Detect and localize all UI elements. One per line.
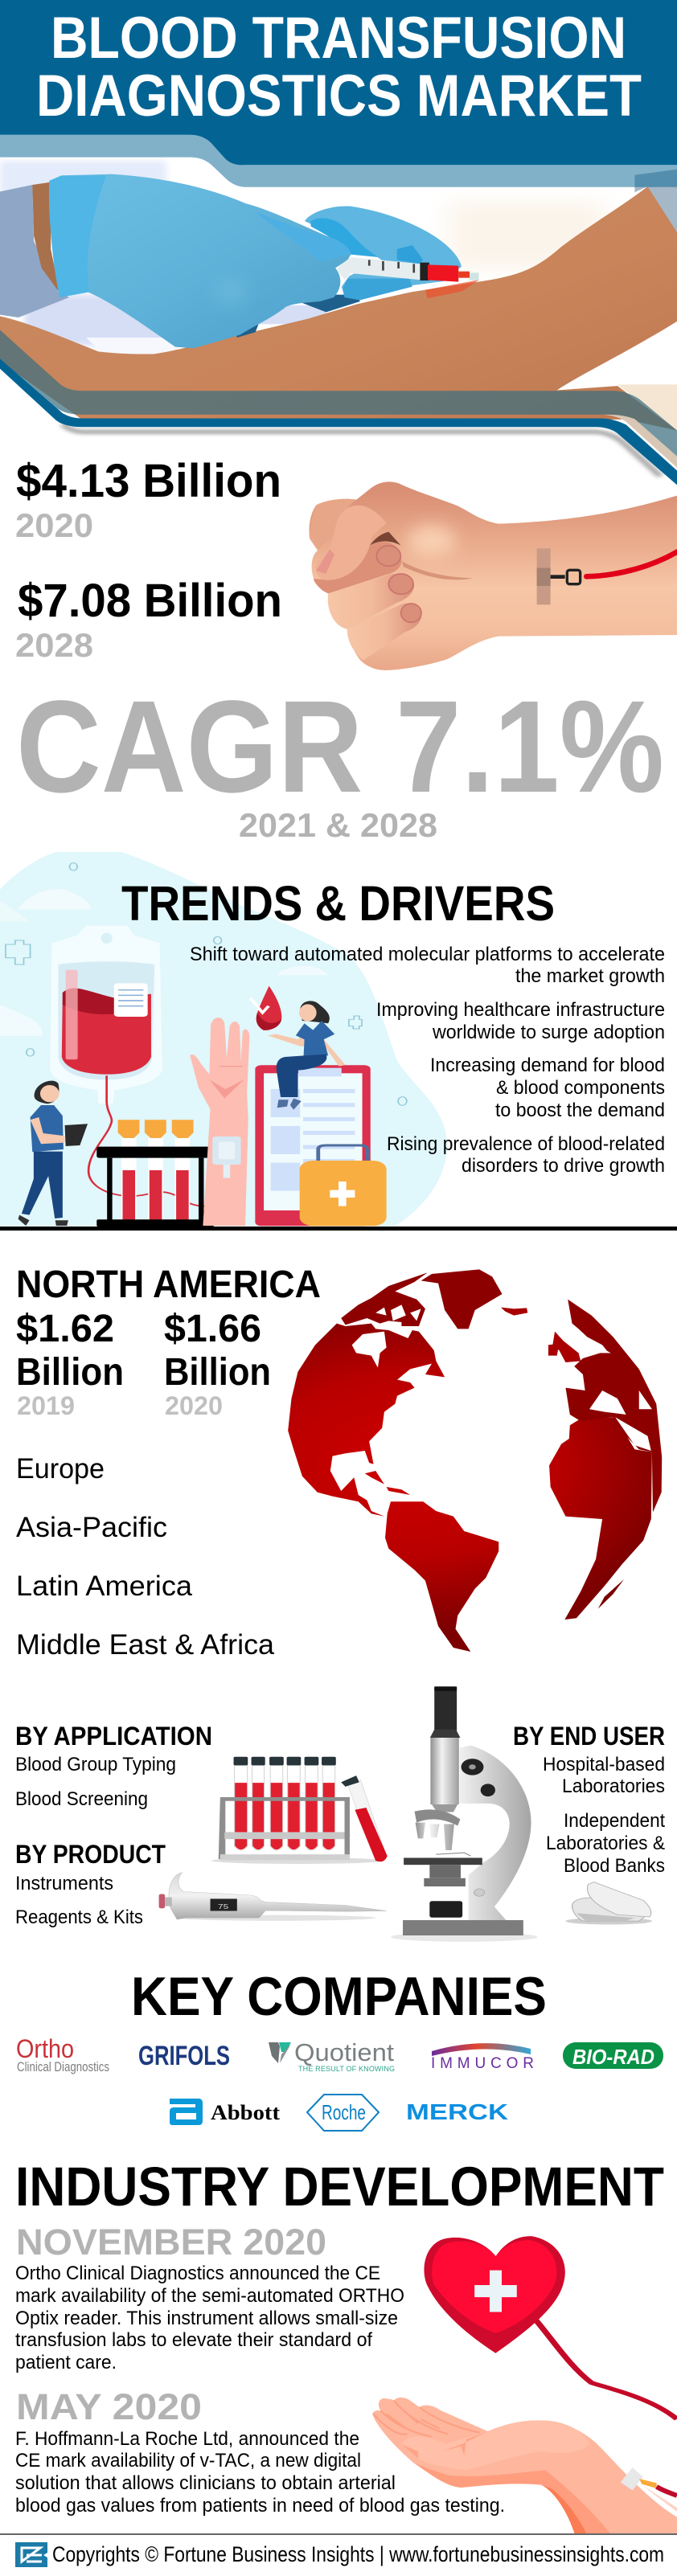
icon: seated nurse (268, 1001, 346, 1110)
development: may 2020: CE mark availability of v-TAC, a new digital (15, 2450, 361, 2472)
driver 2: Improving healthcare infrastructure (376, 999, 665, 1021)
logo: Merck: MERCK (406, 2099, 508, 2124)
driver 4 (387, 1133, 665, 1177)
segmentation: by end user: Blood Banks (564, 1855, 665, 1877)
icon: blood drop with check (250, 986, 281, 1030)
logo: Grifols: GRIFOLS (138, 2041, 230, 2071)
company logos (16, 2034, 663, 2131)
segmentation: by application (15, 1722, 212, 1810)
photo: gloved hands drawing blood from arm (0, 155, 677, 485)
region list: Latin America (16, 1571, 193, 1602)
driver 1: Shift toward automated molecular platforms to accelerate (190, 944, 665, 965)
icon: fist with IV line (309, 481, 677, 670)
value 2020 (15, 455, 281, 544)
development: may 2020: blood gas values from patients in need of blood gas testing. (15, 2495, 505, 2517)
logo: Abbott (170, 2099, 280, 2125)
region list: Asia-Pacific (16, 1512, 167, 1543)
driver 2: worldwide to surge adoption (432, 1022, 665, 1043)
icon: open hand with IV (372, 2398, 677, 2534)
logo: Quotient: THE RESULT OF KNOWING (298, 2065, 395, 2073)
segmentation: by product: Instruments (15, 1873, 113, 1894)
driver 3 (430, 1055, 665, 1121)
development: may 2020: MAY 2020 (16, 2386, 202, 2427)
icon: heart with tube (424, 2236, 677, 2419)
segmentation: by product (15, 1840, 166, 1928)
development: may 2020: F. Hoffmann-La Roche Ltd, announced the (15, 2428, 359, 2450)
icon: test tubes in rack (96, 1120, 214, 1227)
segmentation: by product: BY PRODUCT (15, 1840, 166, 1869)
heading: key companies: KEY COMPANIES (131, 1966, 547, 2027)
market values (15, 455, 282, 664)
icon: pipette: 75 (218, 1903, 228, 1911)
development: november 2020: patient care. (15, 2352, 117, 2373)
segmentation: by end user: Hospital-based (543, 1754, 665, 1775)
value 2028 (15, 575, 282, 664)
segmentation: by application: Blood Screening (15, 1788, 148, 1810)
development: november 2020 (15, 2222, 404, 2373)
icon: blood bag (50, 926, 226, 1206)
icon: petri dishes (565, 1882, 652, 1925)
driver 4: Rising prevalence of blood-related (387, 1133, 665, 1155)
value 2020: $4.13 Billion (16, 455, 281, 507)
heading: north america: NORTH AMERICA (16, 1263, 321, 1306)
value 2019: $1.62 (16, 1308, 114, 1350)
logo: Ortho (16, 2034, 109, 2074)
development: november 2020: Ortho Clinical Diagnostics announced the CE (15, 2263, 380, 2284)
segmentation: by product: Reagents & Kits (15, 1906, 143, 1928)
logo: Immucor (431, 2043, 534, 2072)
logo: Ortho: Clinical Diagnostics (17, 2059, 109, 2074)
development: november 2020: NOVEMBER 2020 (16, 2222, 326, 2263)
value 2020: Billion (164, 1351, 271, 1394)
icon: pipette (159, 1873, 387, 1921)
value 2028: 2028 (15, 626, 93, 664)
regional figures (16, 1263, 321, 1661)
section divider: trends bottom rule (0, 1227, 677, 1231)
development: november 2020: mark availability of the semi-automated ORTHO (15, 2285, 404, 2307)
driver 2 (376, 999, 665, 1043)
footer (0, 2533, 677, 2567)
development: november 2020: transfusion labs to elevate their standard of (15, 2329, 372, 2351)
segmentation: by application: BY APPLICATION (15, 1722, 212, 1751)
segmentation: by end user (513, 1722, 665, 1877)
value 2020: 2020 (165, 1391, 223, 1420)
segmentation: by end user: Independent (564, 1810, 665, 1832)
value 2028: $7.08 Billion (18, 575, 282, 627)
driver 1: the market growth (515, 965, 665, 987)
logo: Quotient (269, 2038, 395, 2073)
icon: microscope (391, 1686, 538, 1942)
icon: red globe (288, 1269, 662, 1652)
icon: first aid kit (300, 1145, 387, 1226)
logo: Roche: Roche (322, 2100, 366, 2124)
logo: Immucor: IMMUCOR (431, 2055, 534, 2072)
illustration: trends and drivers scene (0, 852, 447, 1227)
region list: Europe (16, 1453, 105, 1485)
segmentation: by end user: Laboratories & (546, 1833, 665, 1854)
logo: Ortho: Ortho (16, 2034, 74, 2063)
icon: clipboard (255, 1065, 371, 1226)
driver 3: Increasing demand for blood (430, 1055, 665, 1076)
value 2020: $1.66 (164, 1308, 261, 1350)
value 2019: 2019 (17, 1391, 75, 1420)
development: november 2020: Optix reader. This instrument allows small-size (15, 2308, 398, 2329)
icon: test tube rack (211, 1757, 388, 1864)
header banner (0, 0, 677, 187)
logo: Quotient: Quotient (294, 2038, 394, 2066)
icon: open hand (190, 1018, 249, 1226)
region list: Middle East & Africa (16, 1629, 275, 1661)
drivers list (190, 944, 665, 1177)
driver 1 (190, 944, 665, 987)
development: may 2020 (15, 2386, 505, 2517)
segmentation: by end user: Laboratories (562, 1775, 665, 1797)
driver 3: to boost the demand (495, 1100, 665, 1121)
value 2019: Billion (16, 1351, 124, 1394)
region list (16, 1453, 275, 1661)
driver 4: disorders to drive growth (462, 1155, 665, 1177)
value 2020 (164, 1308, 271, 1420)
development: may 2020: solution that allows clinicians to obtain arterial (15, 2472, 396, 2494)
heading: trends and drivers: TRENDS & DRIVERS (121, 876, 555, 931)
icon: fortune business insights logo (15, 2542, 47, 2567)
driver 3: & blood components (496, 1077, 665, 1099)
segmentation: by application: Blood Group Typing (15, 1754, 176, 1775)
logo: Roche (307, 2095, 379, 2131)
logo: Bio-Rad: BIO-RAD (572, 2045, 654, 2069)
logo: Abbott: Abbott (211, 2101, 280, 2124)
icon: nurse with tablet (18, 1081, 88, 1226)
title (36, 6, 642, 129)
value 2019 (16, 1308, 124, 1420)
CAGR figure: 2021 & 2028 (239, 806, 437, 844)
value 2020: 2020 (15, 506, 93, 544)
